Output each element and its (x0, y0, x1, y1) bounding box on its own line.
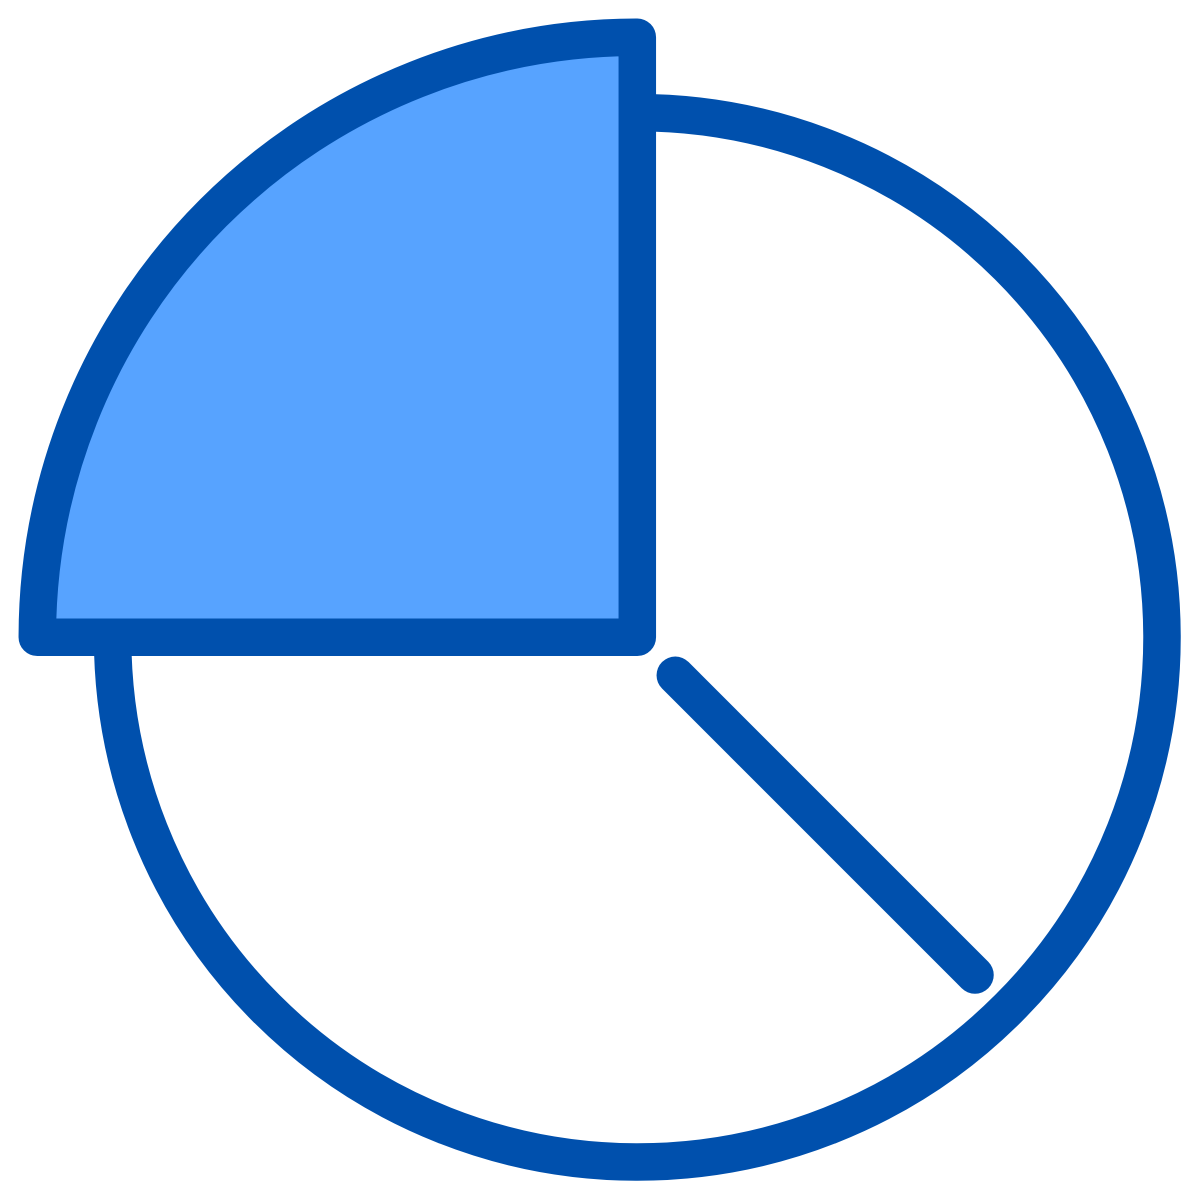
slice divider line (675, 675, 975, 975)
highlighted quarter slice (37, 37, 637, 637)
pie outline circle (113, 113, 1162, 1162)
